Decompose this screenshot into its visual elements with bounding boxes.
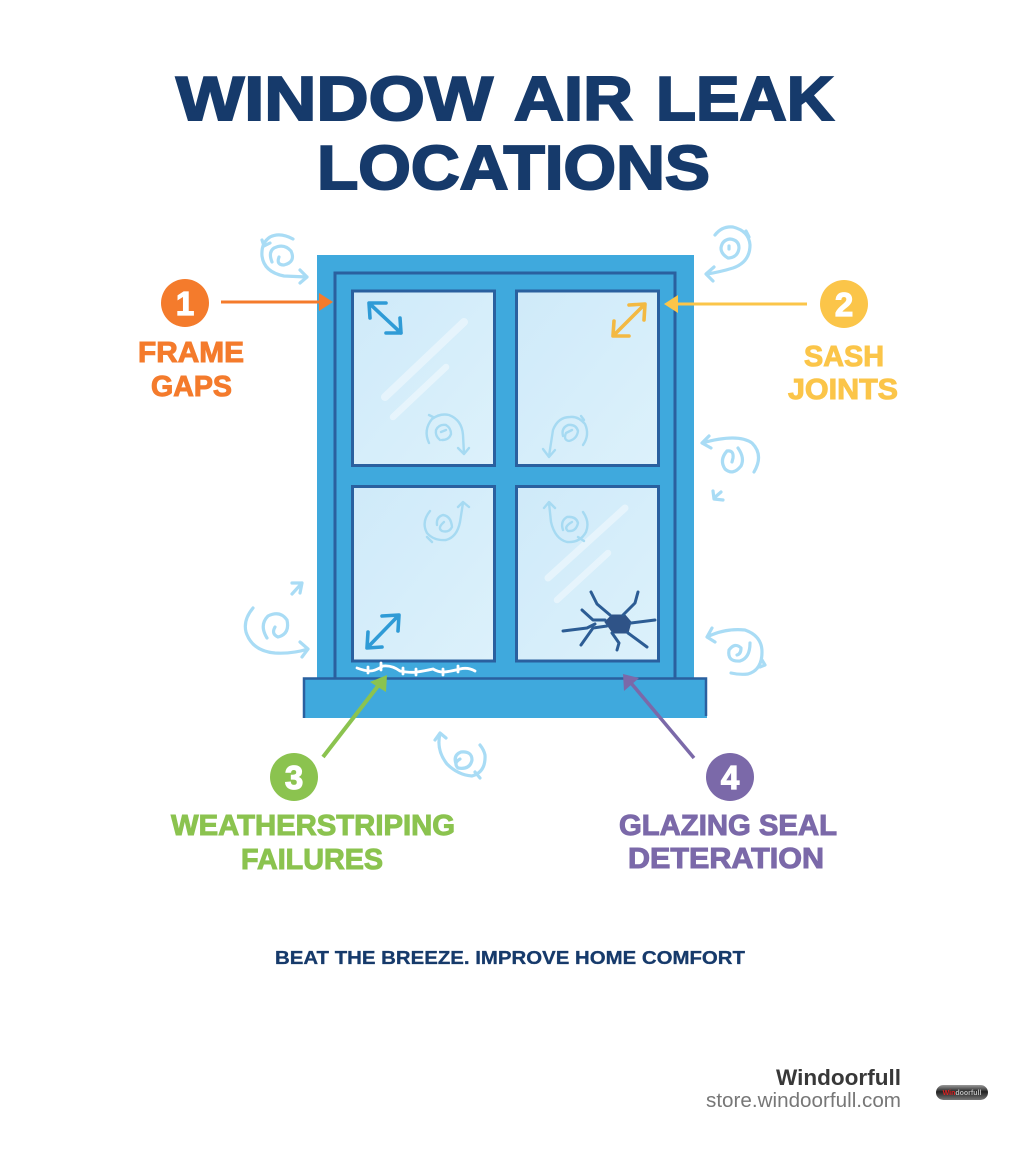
air swirl right middle — [702, 436, 759, 500]
label weatherstriping failures: WEATHERSTRIPING — [171, 810, 455, 842]
bottom left pane — [352, 486, 494, 661]
air swirl pane top right — [543, 416, 587, 457]
footer brand: Windoorfull — [776, 1065, 901, 1090]
glass glare bottom right — [548, 508, 625, 600]
badge 1: 1 — [176, 285, 194, 322]
air swirl top left — [262, 235, 307, 283]
icon: double arrow bottom left — [367, 615, 399, 648]
top right pane — [516, 291, 658, 466]
icon: double arrow top left — [369, 303, 401, 333]
footer brand — [706, 1065, 901, 1112]
badge 4: 4 — [721, 759, 740, 796]
arrow: sash joints — [664, 295, 807, 313]
icon: double arrow top right — [613, 304, 645, 336]
title: AIR — [514, 65, 633, 134]
label weatherstriping failures: FAILURES — [241, 844, 383, 876]
label frame gaps: GAPS — [151, 371, 232, 403]
air swirl pane bottom left — [425, 502, 469, 542]
arrow: frame gaps — [221, 293, 333, 311]
air swirl pane bottom right — [544, 502, 587, 542]
callout 1: frame gaps — [138, 279, 244, 403]
label weatherstriping failures — [171, 810, 455, 876]
title — [176, 65, 834, 203]
tagline: BEAT THE BREEZE. IMPROVE HOME COMFORT — [275, 947, 746, 968]
top left pane — [352, 291, 494, 466]
callout 4: glazing seal deteration — [619, 753, 837, 875]
arrow: weatherstriping failures — [323, 675, 387, 757]
callout 2: sash joints — [788, 280, 898, 406]
air swirl top right — [706, 227, 750, 281]
window illustration — [304, 255, 707, 718]
arrow: glazing seal — [623, 674, 694, 758]
footer brand: store.windoorfull.com — [706, 1090, 901, 1112]
air swirl pane top left — [427, 414, 469, 454]
window sill — [304, 678, 707, 718]
air swirl bottom — [435, 733, 485, 778]
cracked glass — [563, 592, 655, 650]
label glazing seal deteration — [619, 810, 837, 875]
inner frame line — [335, 273, 675, 678]
title: LOCATIONS — [317, 134, 710, 203]
label glazing seal deteration: DETERATION — [628, 843, 824, 875]
glass glare top left — [385, 322, 464, 417]
air swirl right bottom — [707, 628, 765, 674]
label sash joints — [788, 341, 898, 406]
label frame gaps — [138, 337, 244, 403]
label glazing seal deteration: GLAZING SEAL — [619, 810, 837, 842]
badge 3 — [270, 753, 318, 801]
failed weatherstripping — [357, 663, 475, 675]
logo pill: Windoorfull — [943, 1090, 981, 1097]
logo pill — [936, 1085, 988, 1100]
badge 2: 2 — [835, 286, 853, 323]
air swirl left bottom — [245, 583, 308, 657]
title: LEAK — [656, 65, 834, 134]
label sash joints: JOINTS — [788, 374, 898, 406]
label frame gaps: FRAME — [138, 337, 244, 369]
outer window frame — [317, 255, 694, 679]
badge 4 — [706, 753, 754, 801]
callout 3: weatherstriping failures — [171, 753, 455, 876]
bottom right pane — [516, 486, 658, 661]
title: WINDOW — [176, 65, 494, 134]
badge 3: 3 — [285, 759, 303, 796]
label sash joints: SASH — [804, 341, 884, 373]
